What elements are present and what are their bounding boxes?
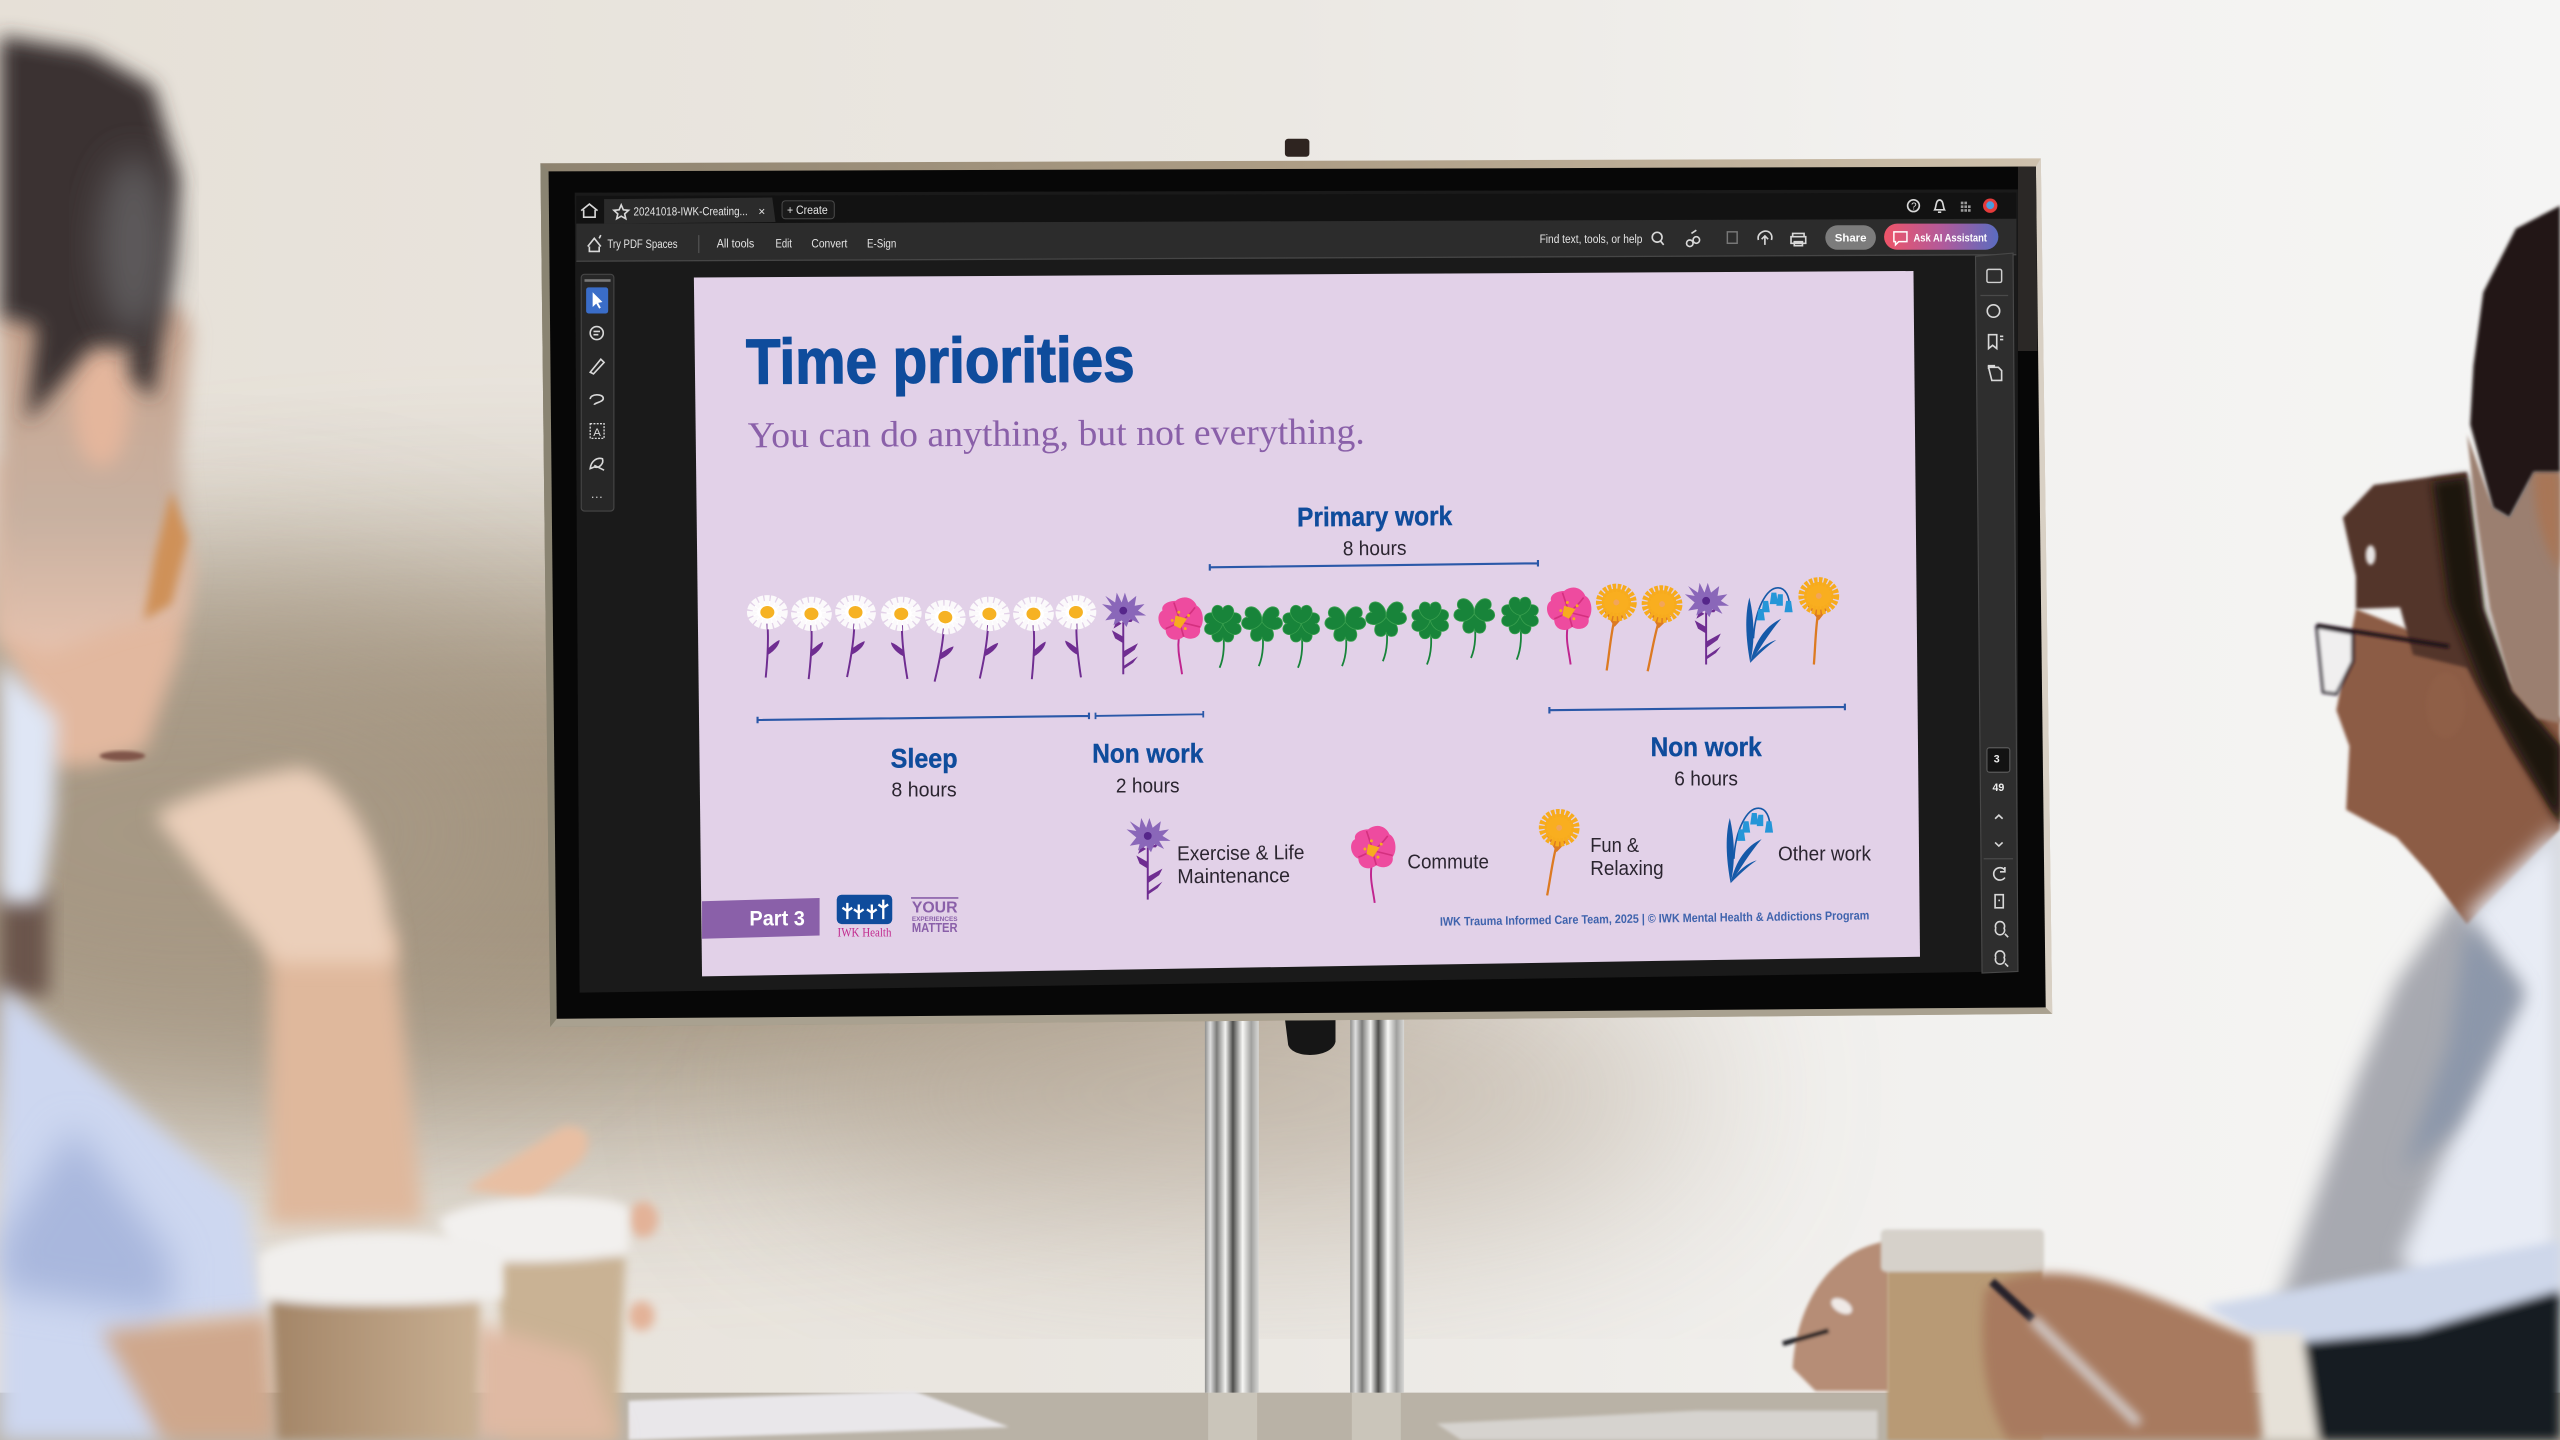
logo: your experiences matter: YOUR — [912, 900, 958, 917]
create button — [782, 201, 834, 219]
woman hair shadow — [2433, 477, 2560, 824]
papers on table — [629, 1391, 1878, 1440]
legend icon: exercise — [1127, 818, 1171, 900]
second face — [0, 457, 193, 766]
table — [0, 1393, 2560, 1440]
webcam — [1285, 139, 1309, 157]
hair grey highlight — [98, 155, 170, 335]
woman ear — [2426, 673, 2465, 738]
man head skin — [0, 305, 191, 653]
left foreground man, blurred — [0, 36, 658, 1440]
flower: commute — [1158, 597, 1203, 674]
monitor frame — [540, 158, 2052, 1027]
hand behind cups — [465, 1126, 588, 1200]
part 3 banner: Part 3 — [749, 908, 805, 931]
ask AI button: Ask AI Assistant — [1913, 232, 1987, 244]
left tool palette — [581, 274, 614, 511]
icon: help: ? — [1911, 201, 1917, 212]
slide — [694, 271, 1920, 976]
footer credit: IWK Trauma Informed Care Team, 2025 | © IWK Mental Health & Addictions Program — [1440, 908, 1869, 929]
shirt — [0, 983, 264, 1440]
bracket: primary work — [1210, 560, 1538, 571]
try pdf spaces label: Try PDF Spaces — [607, 238, 678, 251]
fist — [155, 767, 393, 963]
legend — [1127, 808, 1872, 903]
monitor — [540, 158, 2052, 1027]
bracket: non work 2 hours — [1096, 711, 1203, 719]
bracket: sleep — [758, 713, 1089, 723]
forearm — [269, 931, 423, 1224]
icon: home — [581, 204, 598, 217]
page navigation controls — [1995, 815, 2003, 846]
right hand with pen, blurred — [1783, 1241, 1889, 1391]
icon: bell — [1935, 200, 1944, 212]
non work heading left: Non work — [1092, 738, 1203, 768]
legend label: fun and relaxing: Relaxing — [1590, 858, 1664, 880]
dark jacket and cuff on right — [2204, 1241, 2560, 1440]
man on right, blurred — [2400, 206, 2560, 1331]
title: Time priorities — [746, 324, 1135, 398]
part 3 banner — [702, 898, 820, 939]
grey collar shadow — [2402, 921, 2522, 1172]
woman hair — [2343, 472, 2560, 824]
non work heading right: Non work — [1651, 732, 1762, 762]
upper shirt collar — [0, 661, 57, 903]
man ear — [2534, 472, 2560, 571]
share button — [1825, 225, 1876, 250]
primary work heading: Primary work — [1297, 501, 1452, 532]
woman blouse — [2269, 824, 2560, 1331]
ask AI button — [1884, 224, 1998, 250]
view controls — [1994, 867, 2008, 967]
hair — [0, 36, 180, 423]
logo: your experiences matter — [911, 897, 958, 935]
logo: your experiences matter: MATTER — [912, 920, 958, 935]
dark hair patch behind shoulder — [0, 890, 49, 996]
lower forearm — [101, 1314, 278, 1440]
legend label: exercise and life maintenance: Exercise & Life — [1177, 842, 1305, 865]
man shirt and collar — [2400, 824, 2560, 1331]
icon: apps — [1961, 202, 1971, 212]
menu: convert: Convert — [811, 237, 848, 250]
flowers: primary work clovers — [1205, 597, 1538, 668]
menu: all tools: All tools — [717, 237, 754, 250]
flowers: non work evening — [1547, 581, 1835, 674]
file name tab label: 20241018-IWK-Creating... — [633, 205, 748, 219]
slide background — [694, 271, 1920, 976]
coffee cup right — [1881, 1229, 2044, 1440]
subtitle: You can do anything, but not everything. — [748, 411, 1365, 455]
foreground right hand — [1983, 1273, 2261, 1440]
primary work hours: 8 hours — [1343, 538, 1407, 560]
icon: PDF spaces — [588, 235, 601, 251]
left tool palette: … — [590, 486, 604, 501]
icon: save — [1727, 232, 1737, 243]
glasses — [2317, 625, 2449, 694]
man face — [2467, 434, 2560, 723]
icon: avatar — [1983, 199, 1997, 213]
left tool palette: A — [593, 427, 601, 439]
search field label: Find text, tools, or help — [1540, 233, 1643, 246]
orange ear behind — [144, 490, 188, 620]
create button: + Create — [787, 204, 828, 217]
legend label: commute: Commute — [1407, 852, 1489, 874]
menu: edit: Edit — [776, 237, 792, 250]
tab close: × — [758, 206, 765, 219]
menu: e-sign: E-Sign — [867, 237, 896, 250]
legend label: other work: Other work — [1778, 843, 1872, 865]
fingers — [629, 1202, 658, 1331]
lips shadow — [100, 751, 145, 761]
front coffee cup — [260, 1234, 503, 1440]
sleep heading: Sleep — [891, 743, 958, 773]
logo: your experiences matter: EXPERIENCES — [912, 916, 958, 923]
pen — [1992, 1282, 2033, 1319]
icon: link tools — [1687, 230, 1700, 247]
legend label: exercise and life maintenance: Maintenance — [1177, 865, 1290, 888]
ear — [73, 349, 129, 467]
hair highlight — [2366, 545, 2376, 565]
icon: search — [1652, 232, 1664, 245]
legend label: fun and relaxing: Fun & — [1590, 835, 1640, 857]
icon: help — [1908, 200, 1919, 212]
shirt shadow fold — [0, 1127, 171, 1314]
bezel reflection — [2018, 167, 2038, 351]
flowers: sleep — [752, 598, 1095, 684]
logo: IWK Health: IWK Health — [838, 924, 892, 939]
right side panel — [1976, 253, 2018, 973]
logo: IWK Health — [837, 895, 892, 939]
bezel — [549, 167, 2046, 1019]
man hair — [2470, 206, 2560, 518]
sleep hours: 8 hours — [891, 780, 957, 802]
icon: upload — [1758, 231, 1772, 245]
icon: print — [1791, 233, 1806, 246]
legend icon: fun — [1536, 811, 1577, 898]
non work hours left: 2 hours — [1116, 776, 1180, 798]
icon: star — [614, 205, 629, 219]
stand camera mount — [1285, 1019, 1336, 1055]
non work hours right: 6 hours — [1674, 768, 1738, 790]
hand holding front cup — [473, 1322, 620, 1440]
legend icon: commute — [1351, 826, 1396, 903]
back coffee cup — [439, 1197, 629, 1440]
legend icon: other work — [1727, 808, 1773, 883]
total pages: 49 — [1992, 782, 2004, 794]
tab bar — [576, 193, 2016, 224]
woman neck and face — [2336, 609, 2560, 924]
current page number: 3 — [1994, 753, 2000, 765]
woman with glasses, blurred — [2269, 472, 2560, 1331]
app window — [575, 189, 2018, 993]
main toolbar — [576, 219, 2016, 261]
bracket: non work 6 hours — [1549, 704, 1845, 713]
flower: exercise — [1102, 593, 1146, 674]
share button: Share — [1835, 233, 1866, 245]
stand poles — [1205, 1016, 1404, 1393]
